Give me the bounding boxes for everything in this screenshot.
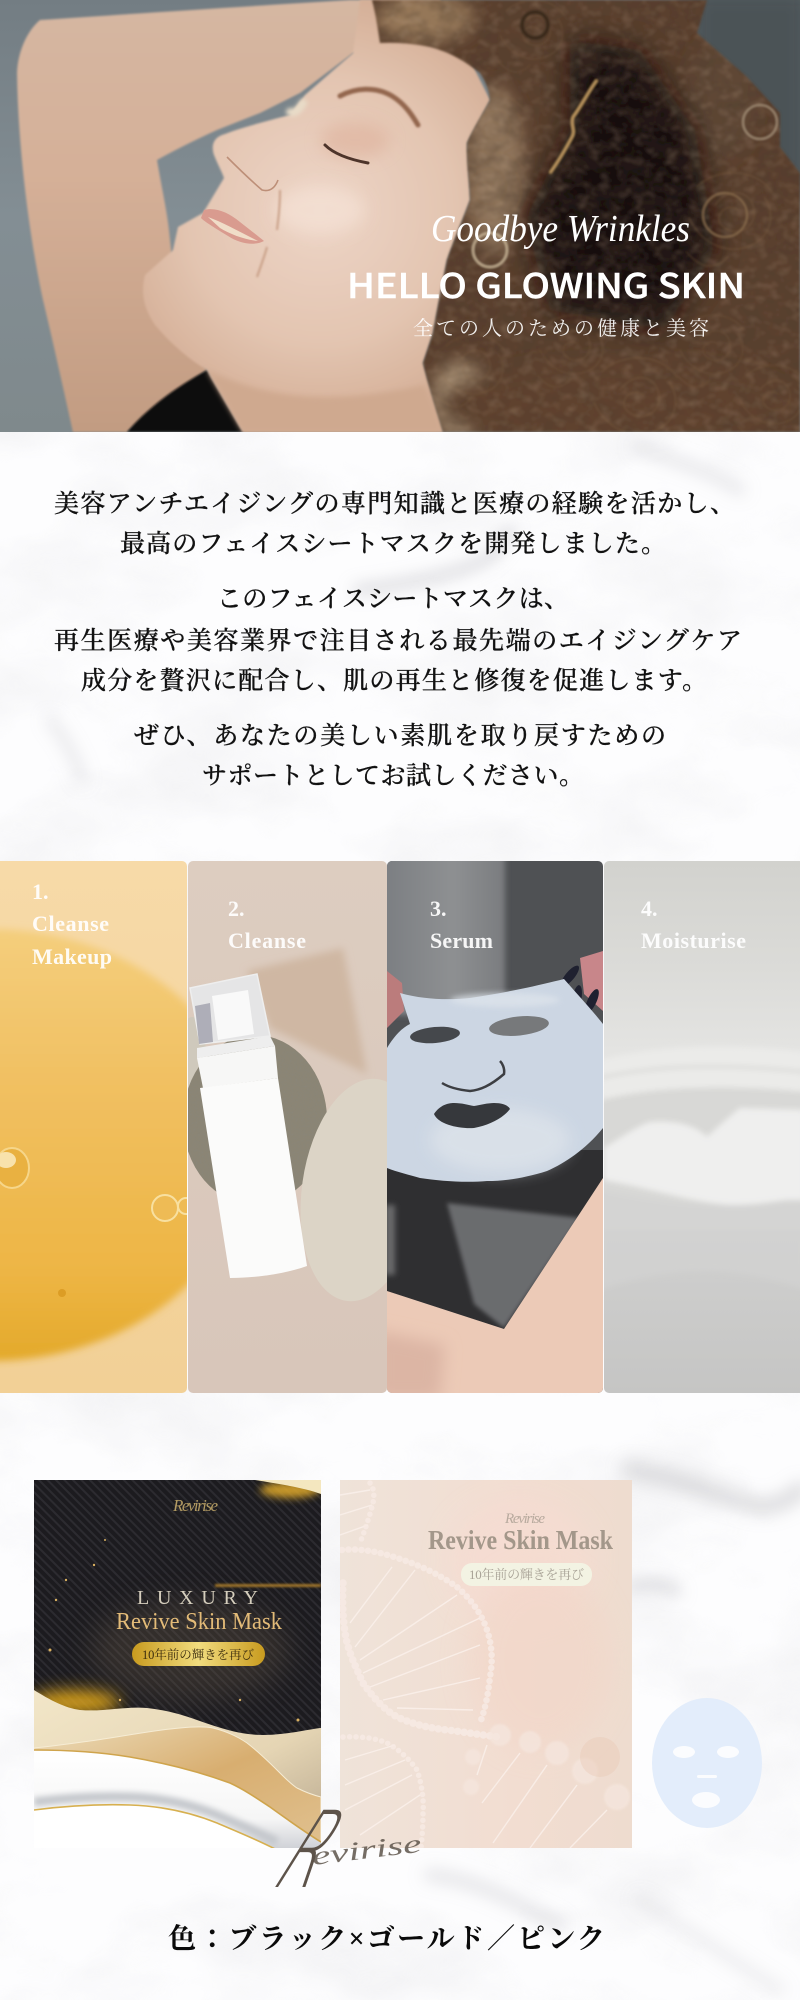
step 4 label: Moisturise (641, 928, 746, 953)
marble background (0, 432, 800, 2000)
step 1 label: 1. (32, 879, 48, 904)
pink package text (428, 1511, 613, 1586)
step 3 label: 3. (430, 896, 446, 921)
step 3 label (430, 896, 493, 953)
cream swirl (604, 1062, 800, 1207)
panel: step 4 moisturise cream (600, 861, 800, 1393)
step 3 label: Serum (430, 928, 493, 953)
step 1 label (32, 879, 112, 969)
DNA beads (463, 1724, 630, 1810)
black package text: LUXURY (137, 1587, 258, 1609)
sheet mask (387, 979, 603, 1182)
caption: colour options: 色：ブラック×ゴールド／ピンク (168, 1923, 605, 1955)
pink package text: Revive Skin Mask (428, 1525, 613, 1555)
panel: step 3 serum sheet mask (375, 845, 603, 1400)
step 2 label: 2. (228, 896, 244, 921)
pink package text: Revirise (504, 1511, 545, 1527)
gold glows (30, 1480, 321, 1722)
black package text: Revirise (172, 1496, 218, 1515)
black package text: Revive Skin Mask (116, 1609, 282, 1635)
arm (17, 0, 400, 432)
intro text block: ぜひ、あなたの美しい素肌を取り戻すための (134, 722, 666, 750)
intro text block: このフェイスシートマスクは、 (217, 586, 569, 613)
DNA helix (340, 1483, 607, 1848)
facial features (201, 89, 418, 277)
panel: step 1 cleanse makeup (0, 861, 187, 1393)
black package text: 10年前の輝きを再び (142, 1647, 254, 1662)
cleanser bottle (190, 974, 307, 1278)
hero text: Goodbye Wrinkles (431, 208, 690, 250)
step 4 label: 4. (641, 896, 658, 921)
oil droplets (0, 1148, 194, 1297)
stones (188, 1017, 387, 1301)
intro text block: サポートとしてお試しください。 (202, 762, 584, 790)
brand script logo (252, 1788, 423, 1912)
intro text block: 再生医療や美容業界で注目される最先端のエイジングケア (54, 627, 742, 655)
intro text block (54, 490, 742, 790)
hero text: HELLO GLOWING SKIN (347, 259, 745, 308)
face (143, 0, 490, 432)
brand script logo: evirise (310, 1829, 423, 1871)
layered gold waves (34, 1690, 321, 1850)
intro text block: 成分を贅沢に配合し、肌の再生と修復を促進します。 (81, 667, 707, 695)
grey backdrop (387, 861, 508, 1018)
hair mass (360, 0, 800, 451)
neck shading (207, 370, 443, 432)
product: black and gold package (30, 1480, 321, 1850)
brand script logo: R (252, 1788, 370, 1912)
step 1 label: Cleanse (32, 911, 109, 936)
product: pink DNA package (340, 1480, 632, 1848)
black top (127, 370, 243, 432)
intro text block: 最高のフェイスシートマスクを開発しました。 (120, 530, 666, 558)
step 2 label (228, 896, 306, 953)
hero photo: woman with curly hair (0, 0, 800, 451)
intro text block: 美容アンチエイジングの専門知識と医療の経験を活かし、 (54, 490, 735, 518)
panel: step 2 cleanse (188, 861, 387, 1393)
black package text (116, 1496, 282, 1666)
hero backdrop (0, 0, 800, 432)
pink package text: 10年前の輝きを再び (469, 1567, 584, 1582)
step 1 label: Makeup (32, 944, 112, 969)
step 4 label (641, 896, 746, 953)
hero text: 全ての人のための健康と美容 (413, 317, 709, 340)
arms and hands (375, 951, 603, 1400)
icon: sheet mask (652, 1698, 762, 1828)
dark cloth (387, 1150, 603, 1329)
step 2 label: Cleanse (228, 928, 306, 953)
hero text (347, 208, 745, 340)
